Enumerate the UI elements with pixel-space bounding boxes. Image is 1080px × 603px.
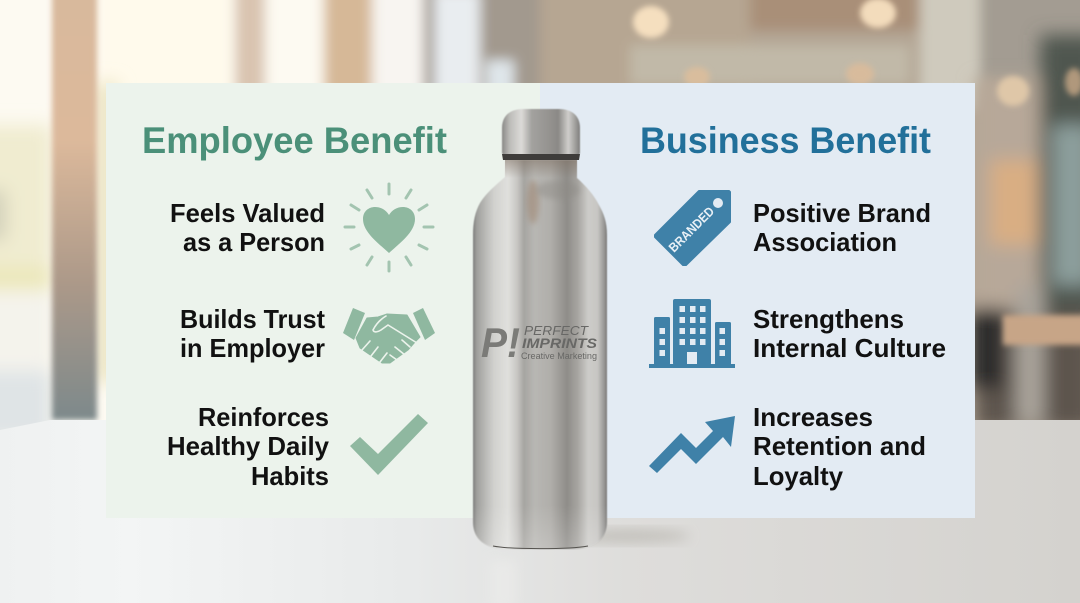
heading: Business Benefit: Business Benefit xyxy=(640,120,931,161)
neck and shoulder reflection xyxy=(505,160,577,178)
text: Builds Trust in Employer xyxy=(180,304,325,363)
text: Reinforces Healthy Daily Habits: Healthy Daily xyxy=(167,431,330,461)
bottle body xyxy=(473,160,607,549)
text: Positive Brand Association: Association xyxy=(753,227,897,257)
panel: employee benefit background xyxy=(106,83,540,518)
text: Feels Valued as a Person xyxy=(170,198,325,257)
panel: business benefit background xyxy=(540,83,975,518)
text: Feels Valued as a Person: as a Person xyxy=(183,227,325,257)
text: Builds Trust in Employer: in Employer xyxy=(180,333,325,363)
logo on bottle: P! xyxy=(481,319,520,366)
text: Positive Brand Association: Positive Brand xyxy=(753,198,931,228)
text: Strengthens Internal Culture xyxy=(753,304,946,363)
text: Feels Valued as a Person: Feels Valued xyxy=(170,198,325,228)
text: Reinforces Healthy Daily Habits: Habits xyxy=(251,461,329,491)
icon: office buildings xyxy=(649,299,735,368)
text: Increases Retention and Loyalty xyxy=(753,402,926,491)
steel water bottle xyxy=(473,109,607,549)
logo on bottle xyxy=(481,319,598,366)
blurred office background xyxy=(0,0,1080,440)
icon: rising arrow xyxy=(649,416,735,473)
bottle reflection on table xyxy=(490,560,516,603)
text: Reinforces Healthy Daily Habits: Reinforces xyxy=(198,402,329,432)
logo on bottle: PERFECT xyxy=(524,323,589,338)
icon: check mark xyxy=(350,414,428,475)
icon: glowing heart xyxy=(345,184,433,271)
text: Increases Retention and Loyalty: Retention and xyxy=(753,431,926,461)
icon: handshake xyxy=(343,308,435,363)
icon: branded tag: BRANDED xyxy=(666,204,717,255)
heading: Employee Benefit: Employee Benefit xyxy=(142,120,447,161)
bottle shadow on table xyxy=(560,529,690,543)
bottle cap xyxy=(502,109,580,160)
icon: branded tag xyxy=(655,191,730,265)
window pillar xyxy=(52,0,97,420)
wooden table in distance xyxy=(1003,315,1080,345)
logo on bottle: IMPRINTS xyxy=(522,335,598,351)
text: Strengthens Internal Culture: Strengthens xyxy=(753,304,904,334)
text: Positive Brand Association xyxy=(753,198,931,257)
logo on bottle: Creative Marketing xyxy=(521,351,597,362)
benefits panel xyxy=(106,83,975,518)
text: Increases Retention and Loyalty: Loyalty xyxy=(753,461,844,491)
text: Reinforces Healthy Daily Habits xyxy=(167,402,330,491)
text: Builds Trust in Employer: Builds Trust xyxy=(180,304,325,334)
text: Increases Retention and Loyalty: Increases xyxy=(753,402,873,432)
white table surface xyxy=(0,420,1080,603)
text: Strengthens Internal Culture: Internal Culture xyxy=(753,333,946,363)
